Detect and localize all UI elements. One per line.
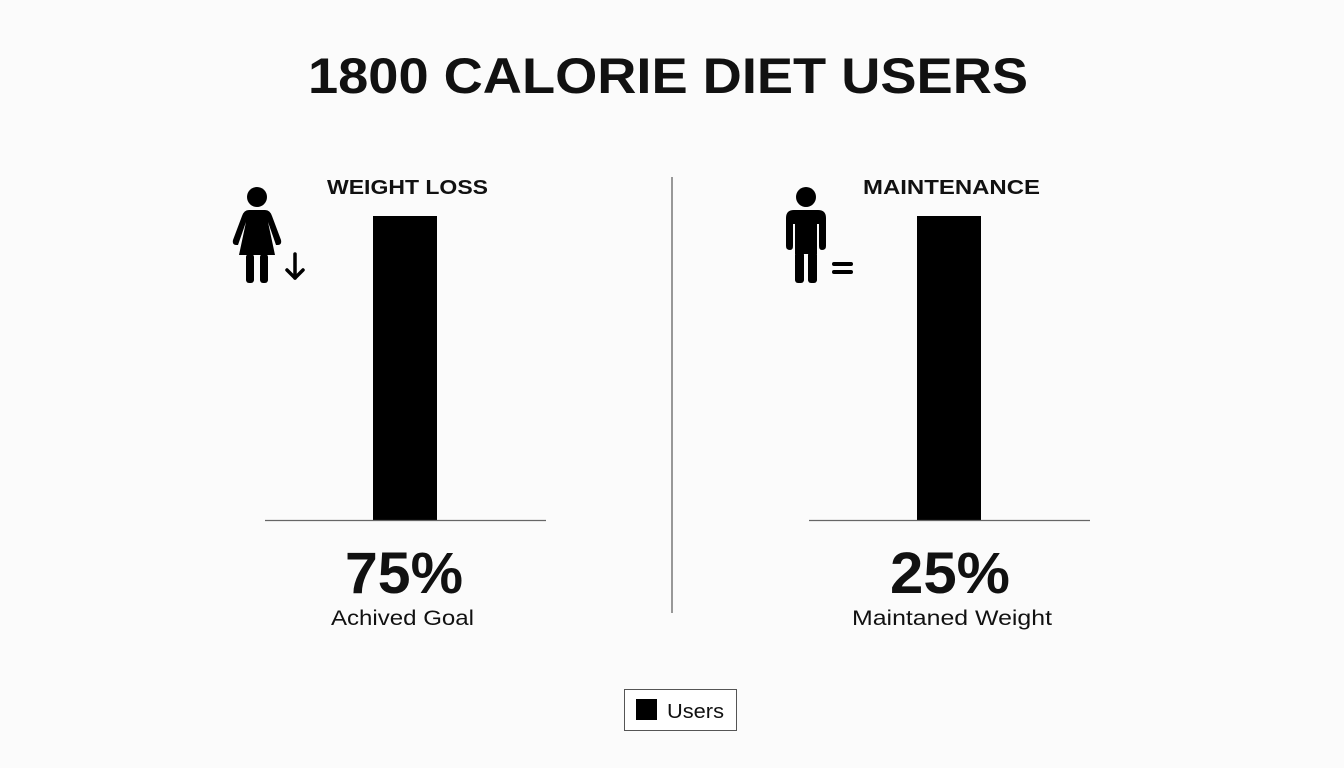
panel: maintenance — [786, 177, 1090, 630]
icon: man — [786, 187, 826, 283]
axis baseline — [265, 520, 546, 522]
axis baseline — [809, 520, 1090, 522]
caption: achived goal: Achived Goal — [331, 607, 474, 630]
bar: maintenance — [917, 216, 981, 520]
legend: Users — [667, 701, 724, 723]
legend — [624, 690, 736, 730]
panel: weight loss — [233, 177, 546, 630]
value: 25%: 25% — [890, 541, 1010, 606]
icon: down arrow — [287, 254, 303, 278]
icon: woman — [233, 187, 281, 283]
bar: weight loss — [373, 216, 437, 520]
title: 1800 CALORIE DIET USERS — [308, 48, 1028, 104]
icon: equals — [832, 262, 853, 274]
value: 75%: 75% — [345, 541, 463, 606]
divider — [671, 177, 673, 613]
heading: maintenance: MAINTENANCE — [863, 177, 1040, 199]
caption: maintaned weight: Maintaned Weight — [852, 607, 1052, 630]
heading: weight loss: WEIGHT LOSS — [327, 177, 488, 199]
